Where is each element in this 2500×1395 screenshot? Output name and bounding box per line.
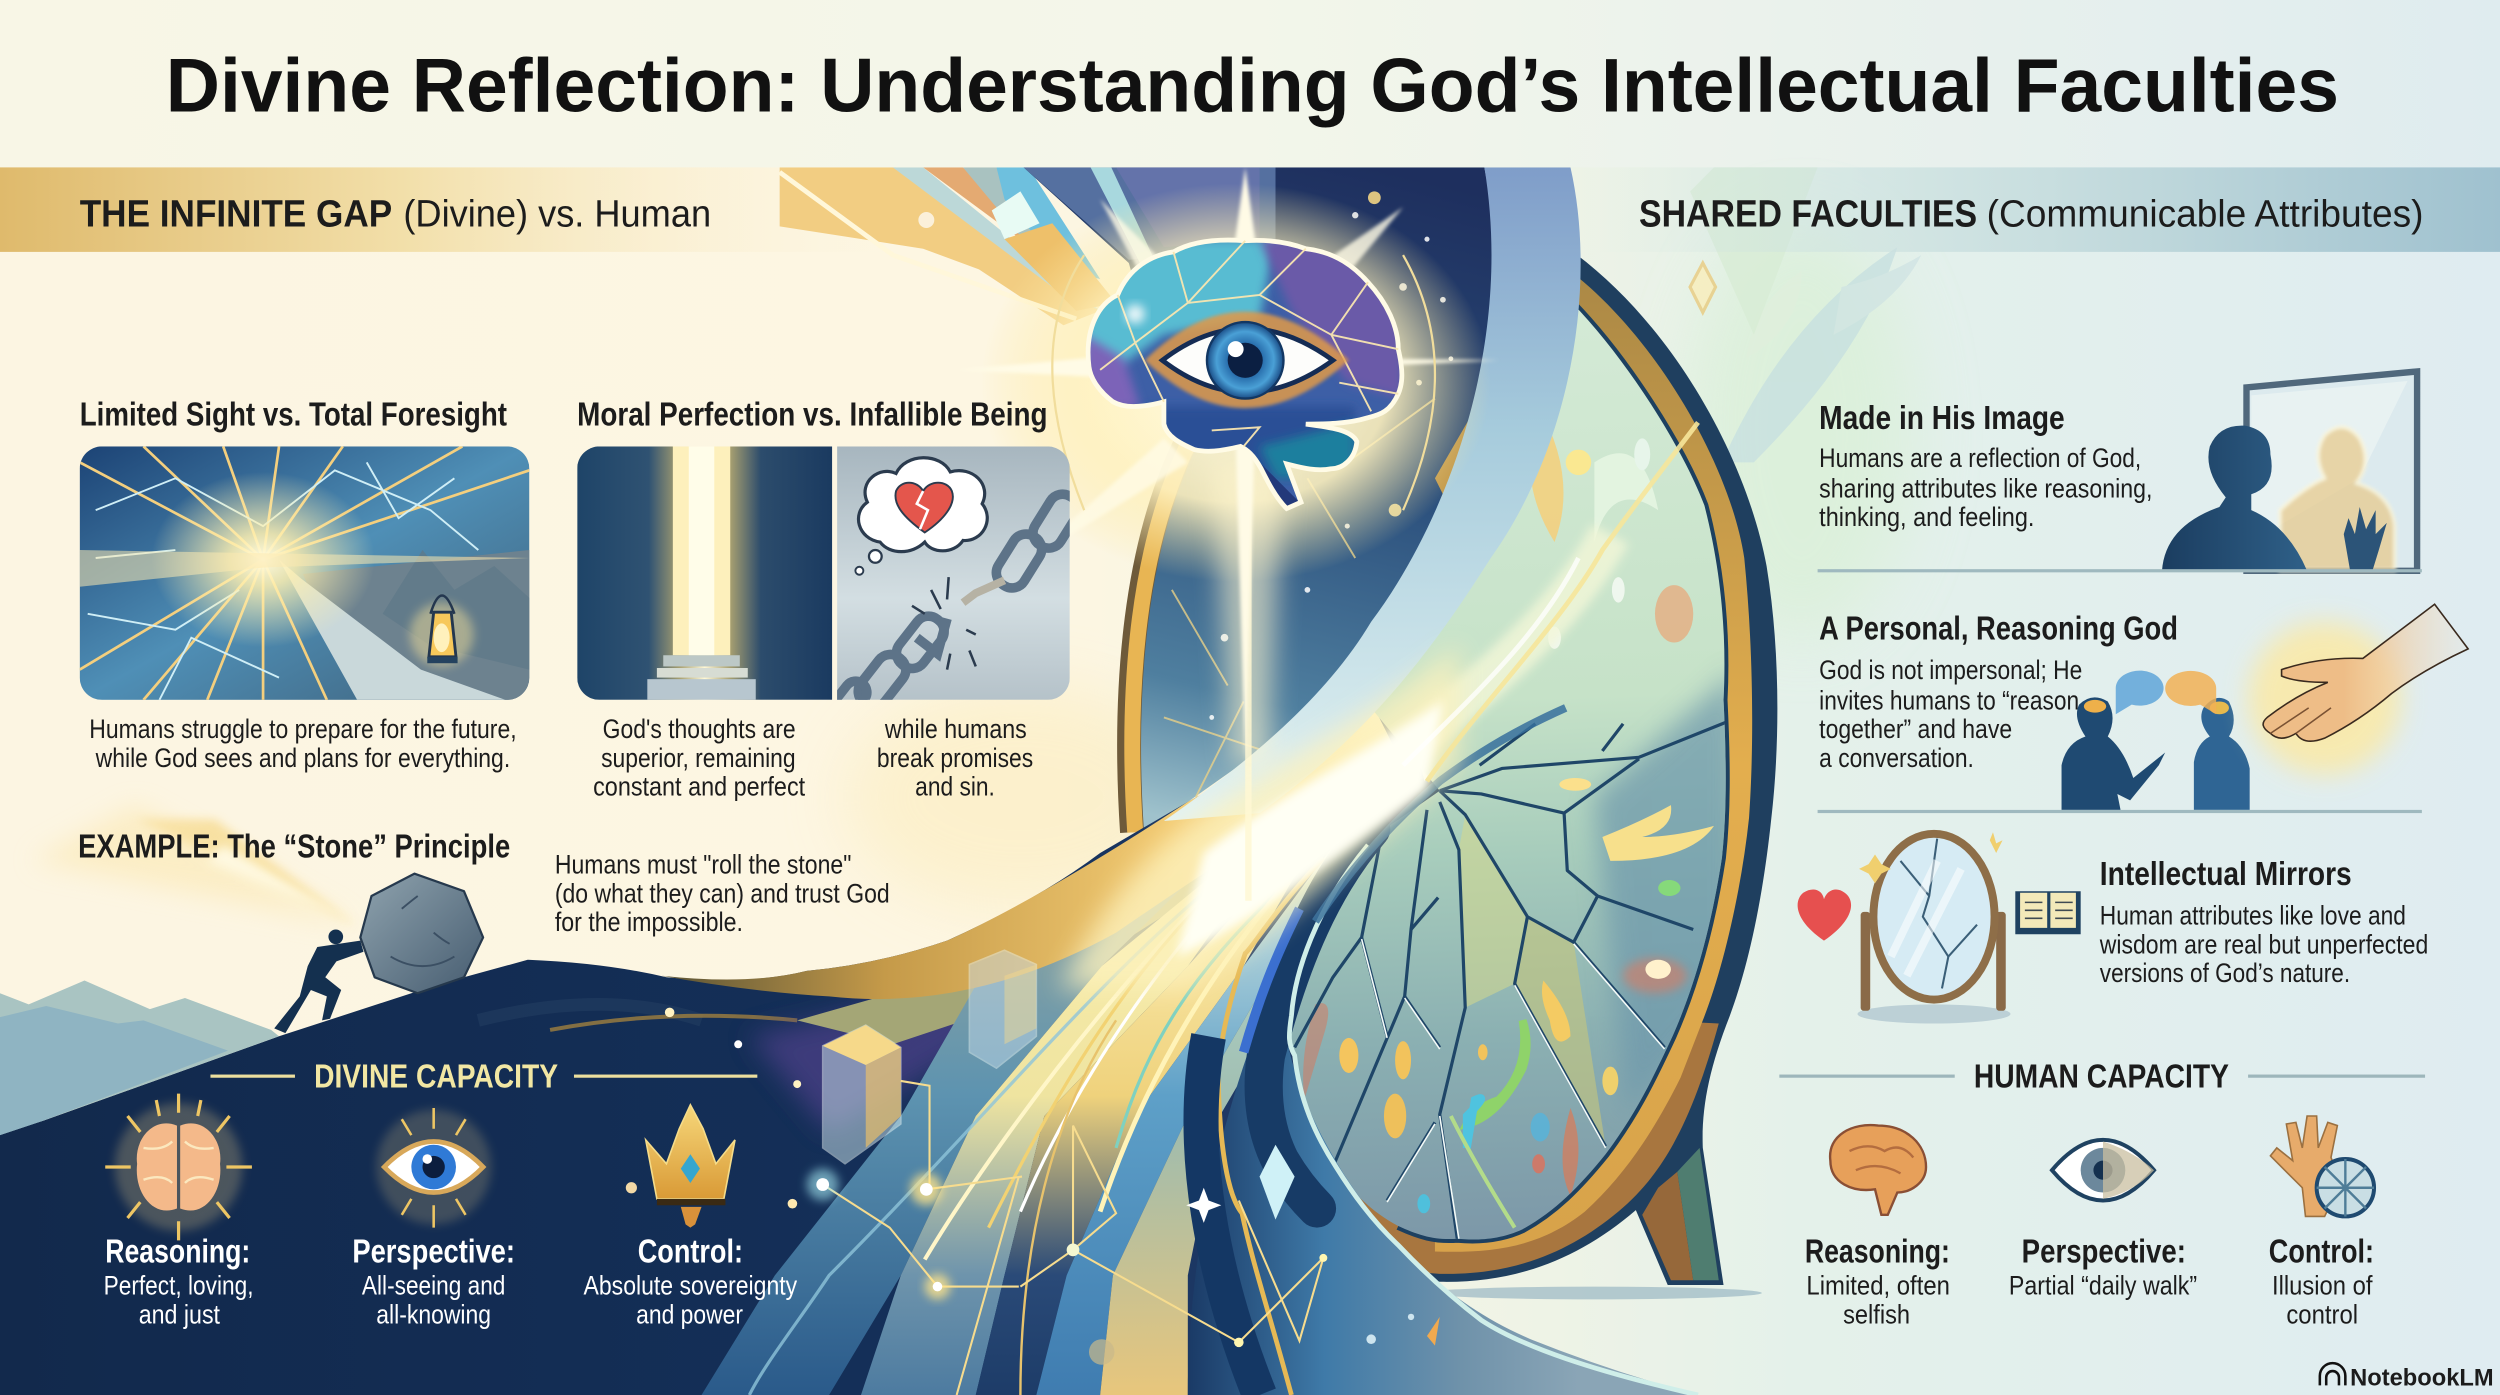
mirror inner edge xyxy=(1398,303,1726,1240)
text: roll the stone: (do what they can) and trust God xyxy=(555,877,890,908)
stream pale sweep xyxy=(1403,534,1610,749)
brain glow xyxy=(981,183,1491,582)
colour blobs xyxy=(1530,407,1563,542)
icon: partial eye xyxy=(2052,1140,2154,1200)
stone xyxy=(360,874,483,993)
stand shadow xyxy=(1427,1287,1762,1299)
label: reasoning human xyxy=(1805,1234,1950,1329)
stream through mirror: light blue band xyxy=(1164,167,1581,821)
label: perspective divine: All-seeing and xyxy=(362,1270,505,1301)
hill ridge highlights xyxy=(478,1004,797,1030)
mirror stand foot xyxy=(1642,1148,1719,1280)
text: intellectual mirrors: versions of God’s nature. xyxy=(2100,957,2350,988)
image: starburst with lantern xyxy=(80,446,529,700)
label: control human: Control: xyxy=(2269,1234,2374,1271)
stream white core xyxy=(1177,701,1443,957)
heading: divine capacity xyxy=(210,1058,757,1095)
text: roll the stone: for the impossible. xyxy=(555,906,743,937)
panel: personal reasoning god xyxy=(1818,604,2468,813)
brain outline xyxy=(1088,240,1402,509)
label: control divine: Control: xyxy=(638,1234,743,1271)
heading: human capacity: HUMAN CAPACITY xyxy=(1974,1058,2229,1095)
yellow-green pane xyxy=(1515,917,1606,1146)
label: reasoning human: Limited, often xyxy=(1806,1270,1950,1301)
label: control human: Illusion of xyxy=(2272,1270,2373,1301)
icon: person facing mirror xyxy=(2162,371,2417,571)
light beams xyxy=(957,167,1499,765)
text: intellectual mirrors: Human attributes like love and xyxy=(2100,900,2406,931)
icon: open book xyxy=(2015,891,2081,934)
purple tint on hill xyxy=(750,998,954,1134)
text: personal god: together” and have xyxy=(1819,713,2012,744)
icon: glowing eye xyxy=(376,1108,491,1228)
label: perspective divine: all-knowing xyxy=(376,1298,491,1329)
caption: god's thoughts: constant and perfect xyxy=(593,771,806,802)
mirror glass with shards xyxy=(1276,287,1754,1259)
central art: mirror and stream xyxy=(0,167,1777,1395)
fan: olive strip xyxy=(798,876,1200,1044)
heading: personal god: A Personal, Reasoning God xyxy=(1819,610,2178,647)
fan strip: pale yellow to slate xyxy=(861,891,1208,1395)
label: control divine: and power xyxy=(636,1298,743,1329)
divine capacity section xyxy=(104,1058,798,1329)
right header text: (Communicable Attributes) xyxy=(1987,192,2423,235)
example: stone principle xyxy=(0,805,890,1135)
stream soft glow xyxy=(1060,646,1459,988)
panel: moral perfection xyxy=(577,397,1084,802)
label: control human: control xyxy=(2286,1298,2358,1329)
sun rays behind figure xyxy=(32,805,357,926)
panel: made in his image xyxy=(1818,371,2422,572)
heading: made in his image: Made in His Image xyxy=(1819,400,2065,437)
thought cloud xyxy=(855,458,987,575)
fan strip: gold to navy xyxy=(976,886,1289,1395)
heading: moral perfection: Moral Perfection vs. Infallible Being xyxy=(577,397,1048,434)
label: perspective divine xyxy=(352,1234,515,1329)
thin halo rings xyxy=(1052,255,1435,510)
label: control divine xyxy=(584,1234,798,1329)
person pushing xyxy=(274,929,364,1033)
text: personal god: invites humans to “reason xyxy=(1819,684,2079,715)
label: reasoning human: Reasoning: xyxy=(1805,1234,1950,1271)
text: personal god: God is not impersonal; He xyxy=(1819,654,2082,685)
label: perspective human: Perspective: xyxy=(2022,1234,2186,1271)
text: personal god: a conversation. xyxy=(1819,742,1974,773)
heading: intellectual mirrors: Intellectual Mirrors xyxy=(2100,856,2352,893)
text: made in his image: thinking, and feeling. xyxy=(1819,501,2034,532)
upper left mirror frame xyxy=(1129,438,1188,832)
text: personal god xyxy=(1819,654,2082,773)
label: reasoning divine: and just xyxy=(139,1298,220,1329)
left header text: THE INFINITE GAP xyxy=(80,192,392,235)
brain shape xyxy=(1084,239,1403,510)
caption: god's thoughts: superior, remaining xyxy=(601,742,796,773)
eye xyxy=(1145,312,1349,408)
caption: limited sight: while God sees and plans for everything. xyxy=(95,742,510,773)
decorative leaves upper right xyxy=(1690,167,1921,462)
notebooklm badge: NotebookLM xyxy=(2350,1364,2494,1391)
panel: intellectual mirrors xyxy=(1798,832,2428,1024)
text: roll the stone: Humans must "roll the stone" xyxy=(555,849,851,880)
icon: human brain xyxy=(1830,1125,1926,1215)
icon: two people in conversation xyxy=(2062,671,2250,810)
mirror gold frame xyxy=(1435,263,1752,1252)
image: pillar of light and steps xyxy=(577,446,832,700)
shard highlights xyxy=(1362,939,1665,1239)
distant mountains back xyxy=(0,980,279,1135)
caption: god's thoughts: God's thoughts are xyxy=(603,713,796,744)
heading: human capacity xyxy=(1779,1058,2425,1095)
caption: humans break promises: and sin. xyxy=(915,771,995,802)
stream blue edge xyxy=(1315,708,1566,921)
label: reasoning divine: Reasoning: xyxy=(105,1234,250,1271)
icon: crown xyxy=(646,1105,735,1228)
caption: humans break promises: while humans xyxy=(884,713,1027,744)
facet lines in cosmos xyxy=(1164,399,1435,797)
text: intellectual mirrors xyxy=(2099,900,2428,988)
header band: left xyxy=(0,167,893,252)
label: reasoning divine xyxy=(104,1234,254,1329)
heading: limited sight: Limited Sight vs. Total Foresight xyxy=(80,397,507,434)
fan of coloured rays upper left xyxy=(780,167,1116,325)
purple sky wedge xyxy=(1024,167,1276,260)
fan thin lines xyxy=(748,902,1266,1395)
label: control divine: Absolute sovereignty xyxy=(584,1270,798,1301)
text: intellectual mirrors: wisdom are real but unperfected xyxy=(2099,928,2428,959)
fan strip: pale gold xyxy=(1100,1002,1254,1395)
label: control human xyxy=(2269,1234,2374,1329)
gold arc along hill top xyxy=(662,701,1395,999)
heading: divine capacity: DIVINE CAPACITY xyxy=(314,1058,558,1095)
lower swirl ribbon xyxy=(1188,1020,1698,1395)
darker right side xyxy=(1594,670,1738,1116)
caption: god's thoughts xyxy=(593,713,806,802)
purple sky right xyxy=(1116,168,1260,236)
constellation network xyxy=(823,1081,1323,1395)
sparkles xyxy=(1859,832,2003,883)
text: roll the stone xyxy=(555,849,890,937)
mirror upper left glass: dark cosmos xyxy=(1024,167,1510,832)
stars in cosmos xyxy=(1209,191,1453,720)
right header text xyxy=(1639,192,2423,235)
mirror brown lower frame xyxy=(1336,1020,1719,1274)
beam glow below brain xyxy=(1212,462,1283,765)
text: made in his image: sharing attributes like reasoning, xyxy=(1819,472,2152,503)
label: reasoning human: selfish xyxy=(1843,1298,1910,1329)
label: perspective human xyxy=(2009,1234,2197,1301)
lantern xyxy=(410,595,474,666)
left header text: (Divine) vs. Human xyxy=(403,192,711,235)
caption: limited sight: Humans struggle to prepare for the future, xyxy=(89,713,517,744)
caption: humans break promises xyxy=(877,713,1033,802)
text: made in his image xyxy=(1819,442,2152,532)
fan strip: blue xyxy=(1036,862,1322,1395)
label: perspective human: Partial “daily walk” xyxy=(2009,1270,2197,1301)
text: made in his image: Humans are a reflection of God, xyxy=(1819,442,2141,473)
left header text xyxy=(80,192,711,235)
broken chain xyxy=(828,489,1084,723)
upper left mirror gold xyxy=(1132,438,1191,832)
right header text: SHARED FACULTIES xyxy=(1639,192,1977,235)
brain with eye emblem xyxy=(957,167,1499,765)
stream thin lines upper right xyxy=(1248,422,1698,901)
fan strip: teal to blue xyxy=(702,890,1180,1395)
crystal cubes xyxy=(823,950,1036,1164)
icon: divine hand xyxy=(2248,604,2468,775)
label: reasoning divine: Perfect, loving, xyxy=(104,1270,254,1301)
title: Divine Reflection: Understanding God’s Intellectual Faculties xyxy=(166,44,2339,129)
panel: limited sight xyxy=(80,397,529,773)
caption: limited sight xyxy=(89,713,517,773)
brain facets xyxy=(1100,241,1398,446)
yellow pane upper xyxy=(1459,815,1527,1008)
teal streak xyxy=(1091,167,1156,263)
icon: standing mirror xyxy=(1857,834,2011,1024)
mirror outer body xyxy=(1422,258,1778,1285)
icon: heart xyxy=(1798,889,1851,941)
heading: example: EXAMPLE: The “Stone” Principle xyxy=(78,829,510,866)
header band: right xyxy=(1594,167,2500,252)
ribbon strips xyxy=(1201,829,1698,1395)
network nodes xyxy=(626,1008,1440,1365)
caption: humans break promises: break promises xyxy=(877,742,1033,773)
human capacity section xyxy=(1779,1058,2425,1329)
shard cracks xyxy=(1295,717,1738,1239)
distant mountains front xyxy=(0,1006,228,1135)
dark hill base xyxy=(0,686,1435,1395)
image: thought cloud and broken chain xyxy=(828,446,1084,723)
icon: glowing brain xyxy=(105,1094,252,1240)
icon: hand with wheel xyxy=(2270,1116,2374,1216)
label: perspective divine: Perspective: xyxy=(352,1234,515,1271)
break sparks xyxy=(912,577,976,670)
